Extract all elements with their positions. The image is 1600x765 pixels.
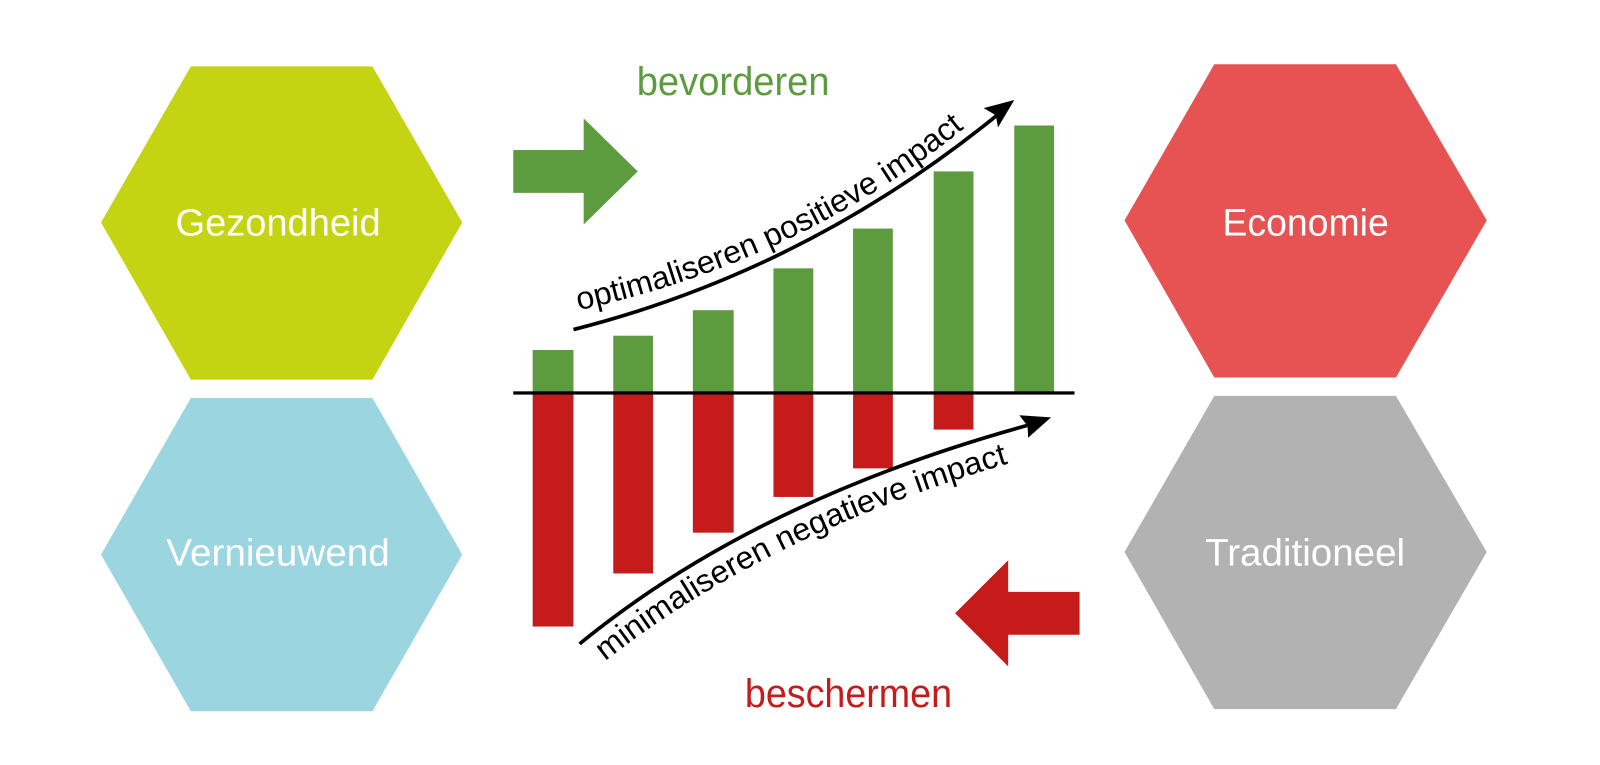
hexagon: Economie: Economie [1222, 202, 1389, 244]
arrow: green right [513, 118, 638, 224]
bar chart: positive and negative impact [513, 126, 1074, 627]
hexagon: Gezondheid [101, 66, 462, 380]
negative red bars [533, 393, 973, 627]
heading: beschermen: beschermen [745, 672, 952, 716]
hexagon: Traditioneel [1124, 396, 1487, 709]
curved arrow: minimaliseren negatieve impact [580, 415, 1051, 644]
hexagon: Vernieuwend: Vernieuwend [166, 531, 390, 573]
curved label: optimaliseren positieve impact: optimaliseren positieve impact [578, 114, 964, 312]
arrow: red left [955, 560, 1080, 666]
positive green bars [533, 126, 1054, 393]
hexagon: Economie [1124, 64, 1487, 378]
hexagon: Gezondheid: Gezondheid [176, 202, 381, 244]
baseline axis [513, 391, 1074, 395]
hexagon: Traditioneel: Traditioneel [1205, 531, 1405, 573]
hexagon: Vernieuwend [101, 398, 462, 711]
curved label: minimaliseren negatieve impact: minimaliseren negatieve impact [596, 444, 1008, 660]
heading: bevorderen: bevorderen [637, 60, 830, 104]
curved arrow: optimaliseren positieve impact [573, 100, 1014, 330]
